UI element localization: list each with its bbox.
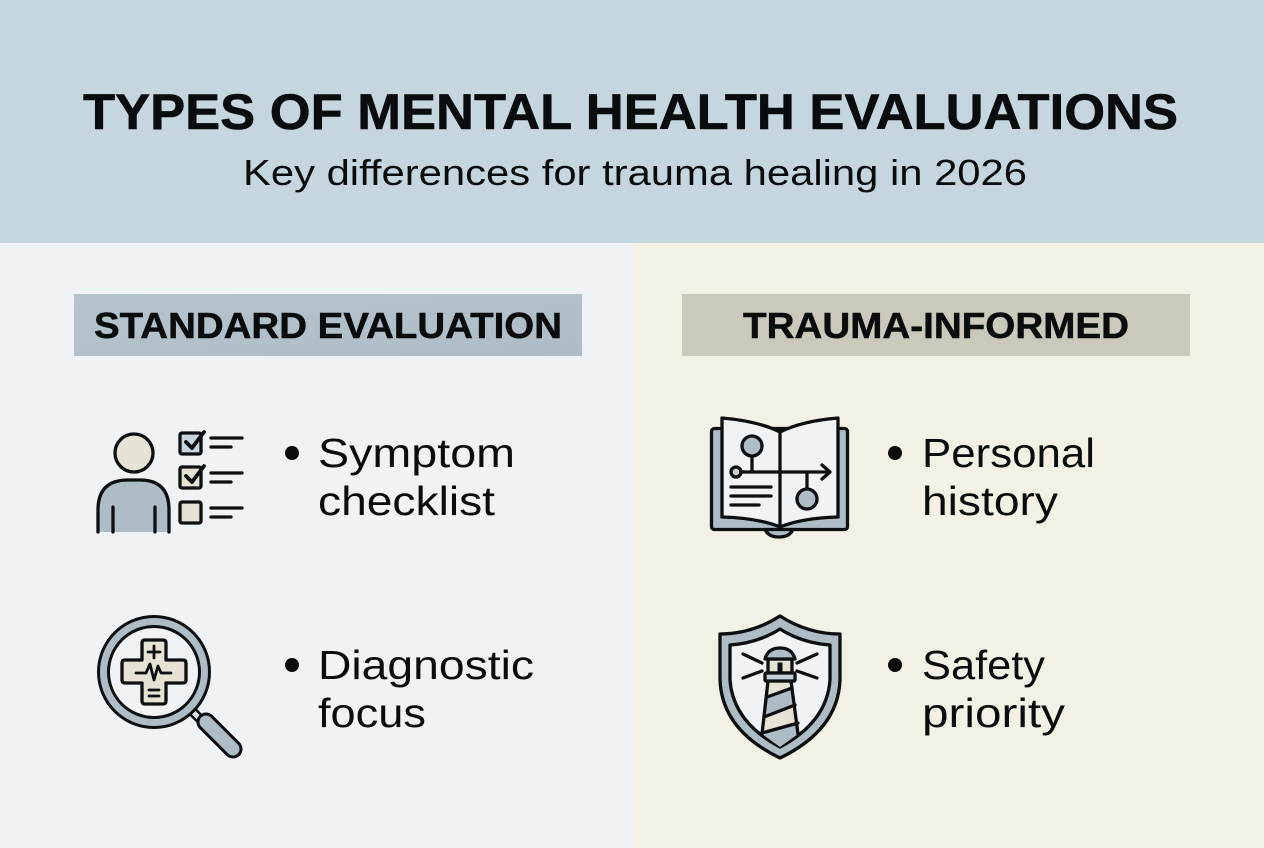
panel: trauma-informed <box>632 243 1264 848</box>
subtitle: Key differences for trauma healing in 2026 <box>243 152 1027 193</box>
list item: personal history: history <box>922 478 1059 524</box>
heading: standard evaluation <box>74 294 582 356</box>
list item: personal history: Personal <box>922 430 1095 476</box>
list item: safety priority: Safety <box>922 642 1046 688</box>
list item: diagnostic focus: Diagnostic <box>318 642 534 688</box>
panel: header band <box>0 0 1264 243</box>
heading: trauma-informed <box>682 294 1190 356</box>
icon: shield with lighthouse <box>720 616 840 758</box>
panel: standard evaluation <box>0 243 632 848</box>
list item: symptom checklist: checklist <box>318 478 496 524</box>
heading: standard evaluation: STANDARD EVALUATION <box>94 305 562 346</box>
heading: trauma-informed: TRAUMA-INFORMED <box>743 305 1129 346</box>
icon: person with checklist <box>98 432 242 532</box>
icon: open book with timeline <box>712 418 848 537</box>
list item: diagnostic focus <box>285 642 534 736</box>
list item: diagnostic focus: focus <box>318 690 426 736</box>
list item: symptom checklist: Symptom <box>318 430 515 476</box>
list item: safety priority <box>888 642 1066 736</box>
list item: symptom checklist <box>285 430 515 524</box>
list item: safety priority: priority <box>922 690 1066 736</box>
list item: personal history <box>888 430 1095 524</box>
title: TYPES OF MENTAL HEALTH EVALUATIONS <box>83 84 1178 140</box>
icon: magnifier with medical cross <box>104 622 233 749</box>
